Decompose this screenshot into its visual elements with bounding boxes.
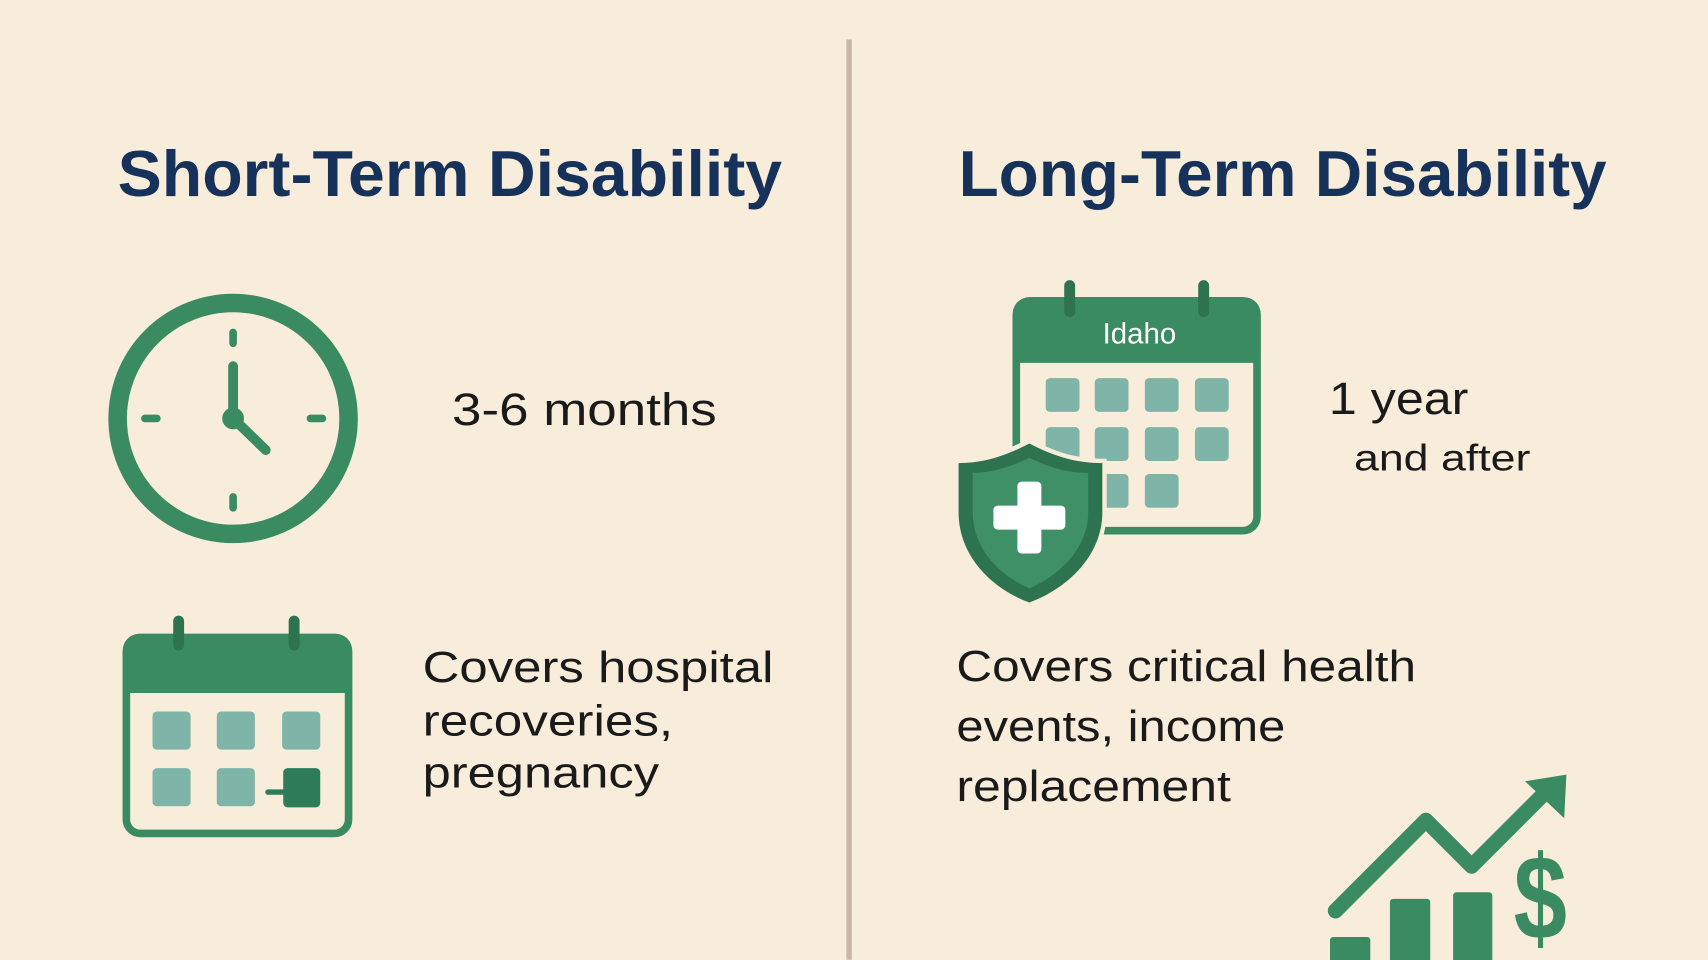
text: covers critical health: replacement <box>956 763 1231 811</box>
text: covers critical health: events, income <box>956 703 1285 751</box>
title: short-term: Short-Term Disability <box>118 137 782 210</box>
icon: clock <box>118 303 349 534</box>
text: 1 year and after: 1 year <box>1329 373 1468 424</box>
text: 3-6 months: 3-6 months <box>452 384 717 435</box>
icon: calendar Idaho with shield: Idaho <box>1103 317 1176 350</box>
text: covers hospital: Covers hospital <box>423 644 773 692</box>
text: covers critical health: Covers critical health <box>956 643 1416 691</box>
icon: calendar Idaho with shield <box>954 280 1260 607</box>
text: covers hospital <box>423 644 773 798</box>
text: covers hospital: pregnancy <box>423 750 659 798</box>
text: covers hospital: recoveries, <box>423 697 673 745</box>
text: 1 year and after <box>1329 373 1530 479</box>
title: long-term: Long-Term Disability <box>959 137 1607 210</box>
text: covers critical health <box>956 643 1416 811</box>
text: 1 year and after: and after <box>1354 437 1530 479</box>
icon: growth chart <box>1330 775 1567 960</box>
icon: calendar left <box>123 616 352 833</box>
